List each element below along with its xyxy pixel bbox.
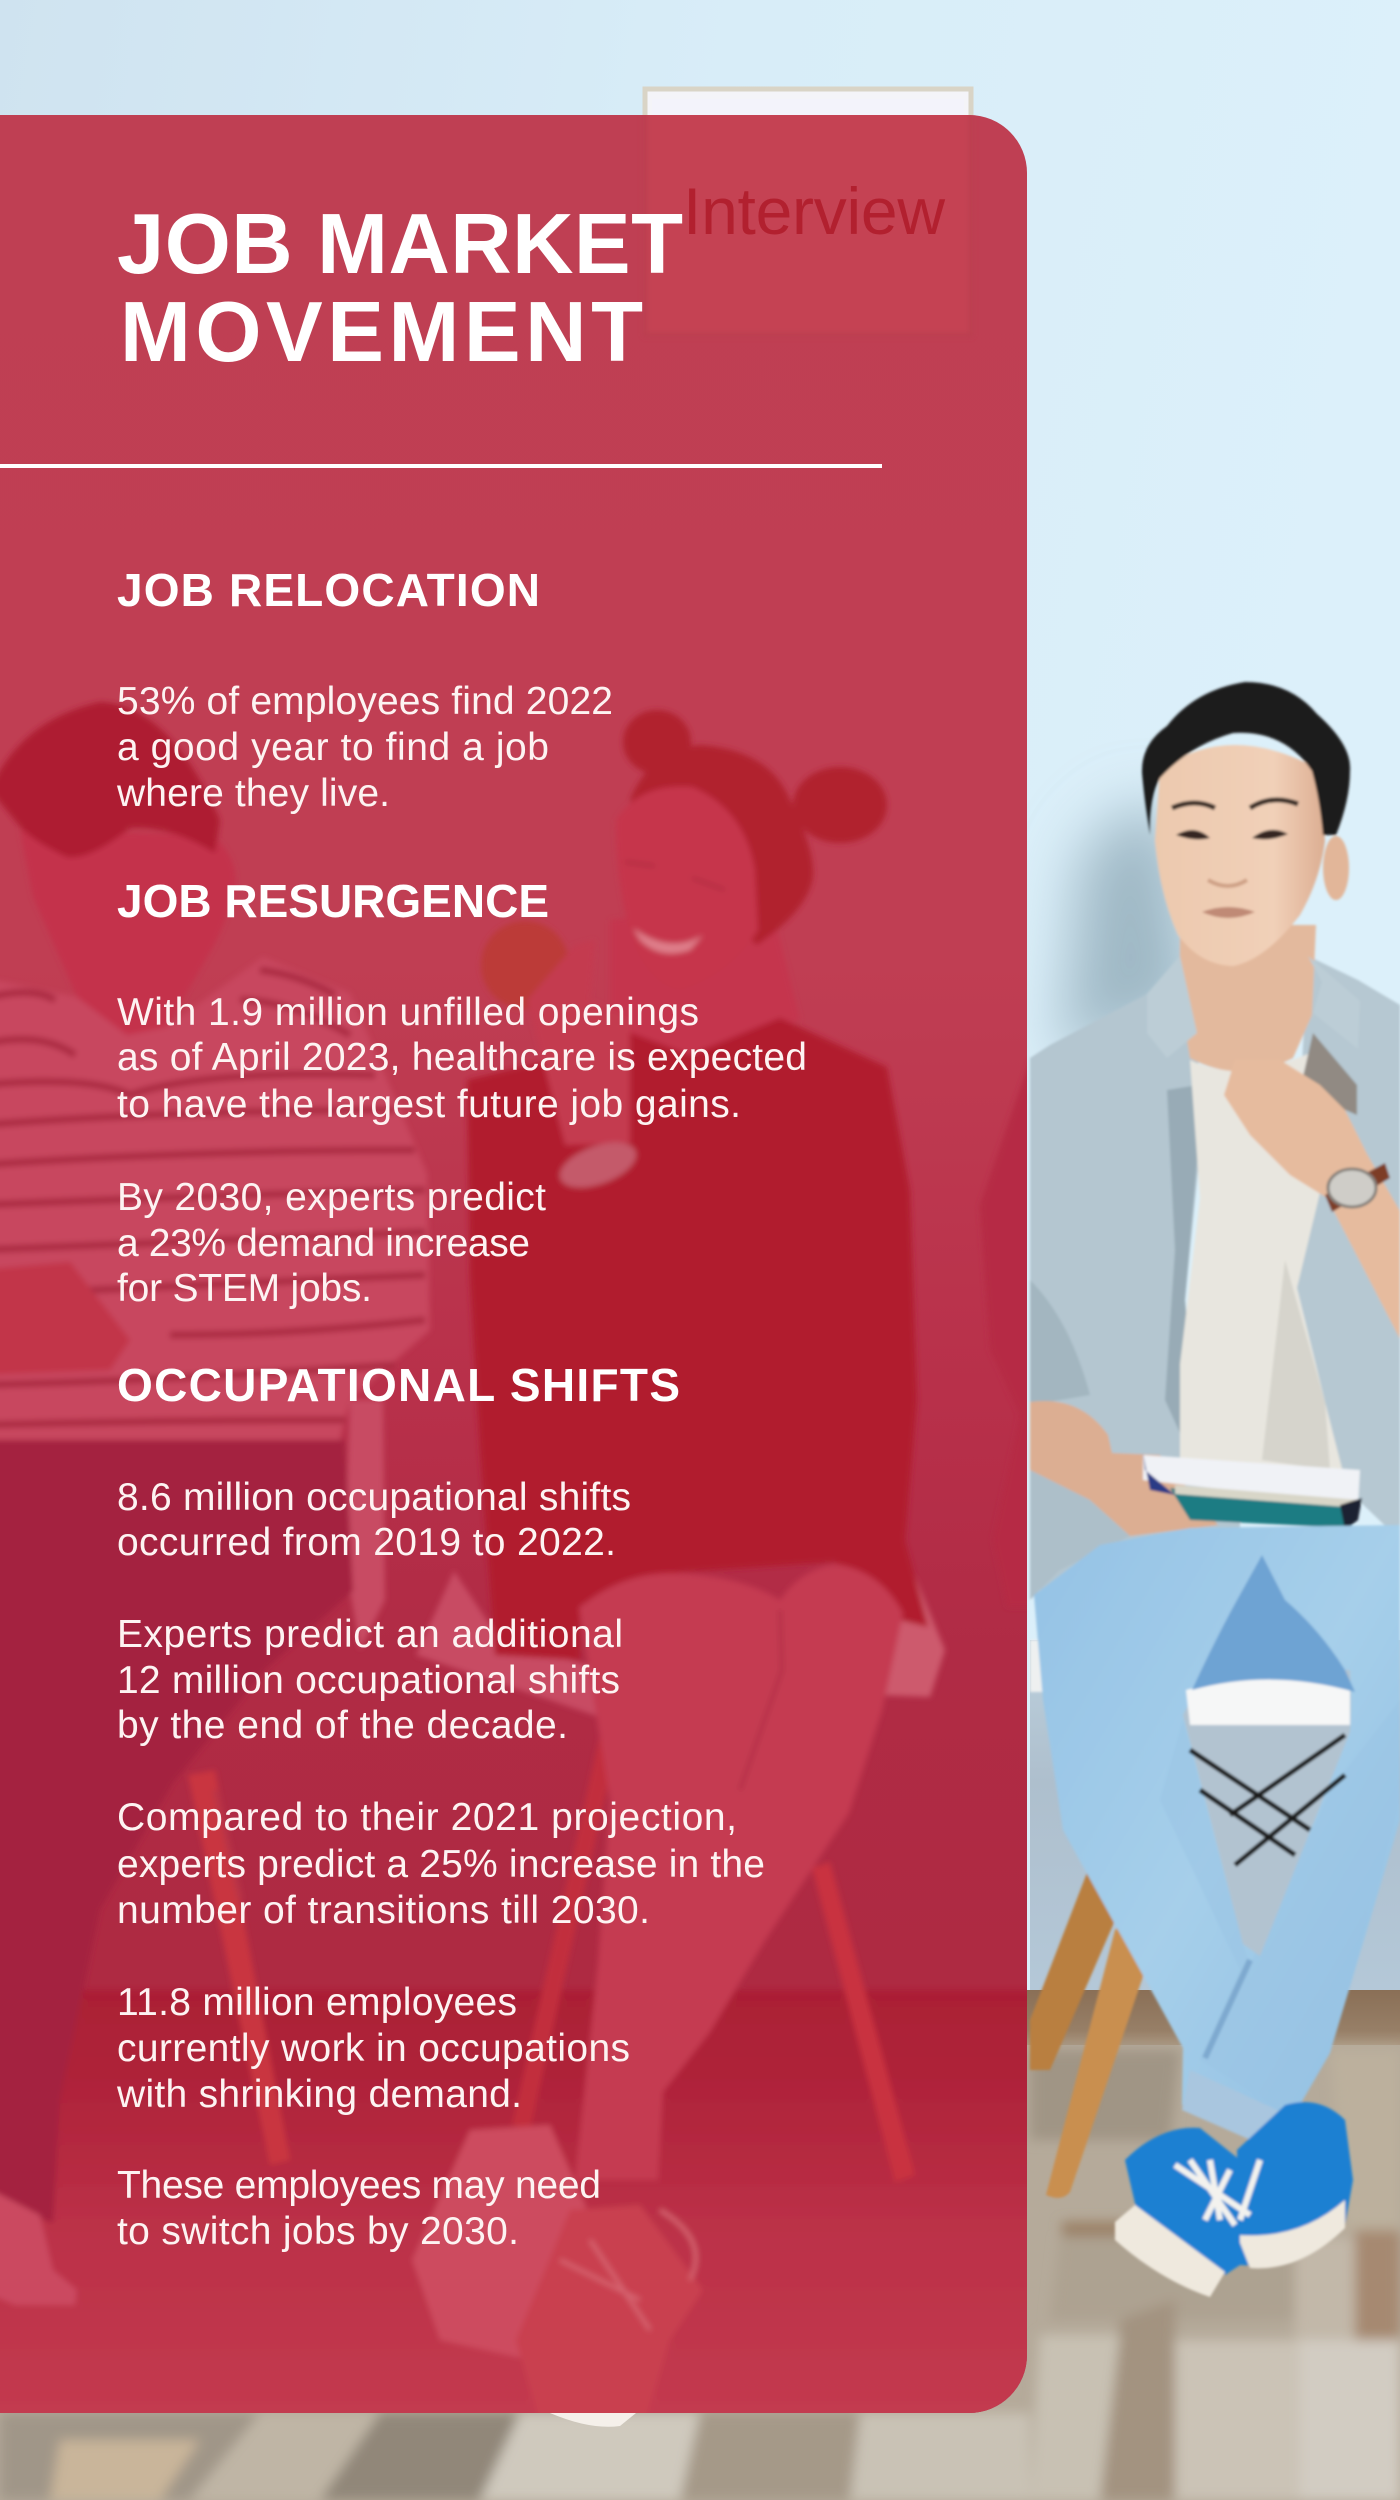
text: 25 percent increase: Compared to their 2021 projection, — [117, 1796, 737, 1839]
text: 8.6 million shifts: occurred from 2019 to 2022. — [117, 1521, 616, 1564]
woman: bracelet — [556, 1140, 640, 1192]
Interview sign text: Interview — [683, 174, 945, 248]
man on left: jeans — [0, 1435, 353, 2223]
wall picture frame with Interview sign — [645, 89, 971, 337]
heading: job resurgence: JOB RESURGENCE — [117, 875, 549, 927]
woman: arm with apple — [481, 921, 630, 1145]
text: 25 percent increase: experts predict a 25% increase in the — [117, 1843, 765, 1886]
title — [117, 197, 683, 380]
jeans — [1034, 1525, 1400, 2150]
man on left: shirt — [0, 957, 430, 1440]
face — [1155, 745, 1325, 966]
shirt stripes — [0, 970, 425, 1425]
text: shrinking demand — [116, 1981, 630, 2116]
woman: legs — [575, 1564, 903, 2180]
text: 8.6 million shifts: 8.6 million occupational shifts — [117, 1476, 631, 1519]
gap between legs — [1183, 1670, 1351, 1956]
woman: hair — [623, 710, 887, 945]
text: switch jobs: to switch jobs by 2030. — [117, 2210, 519, 2253]
title: MOVEMENT — [120, 285, 643, 380]
floor planks — [0, 2050, 1400, 2500]
woman: dress — [467, 1018, 928, 1660]
panel: translucent red overlay with photo of two people — [0, 100, 1060, 2490]
text: STEM demand: for STEM jobs. — [117, 1267, 372, 1310]
text: shrinking demand: 11.8 million employees — [117, 1981, 517, 2024]
text: job relocation: 53% of employees find 2022 — [117, 680, 613, 723]
notebooks — [1143, 1453, 1362, 1530]
chest hand and forearm — [1224, 1060, 1400, 1339]
text: shrinking demand: with shrinking demand. — [116, 2073, 522, 2116]
woman's chair — [188, 1398, 947, 2181]
neck — [1180, 925, 1316, 1072]
eyebrows and eyes — [1172, 800, 1298, 808]
chair — [1030, 1640, 1152, 2198]
ear — [1323, 836, 1349, 900]
wrist watch — [1325, 1163, 1390, 1212]
collars — [1147, 956, 1360, 1058]
text: 25 percent increase — [117, 1796, 765, 1932]
woman: neck — [613, 920, 794, 1014]
nose and lips — [1208, 880, 1247, 886]
tinted floor band — [0, 1990, 1027, 2413]
left forearm and hand — [1030, 1401, 1218, 1536]
panel base — [0, 115, 1027, 2413]
sole beyond panel — [550, 2413, 636, 2427]
text: healthcare openings: to have the largest future job gains. — [117, 1083, 741, 1126]
text: job relocation — [116, 680, 613, 815]
shirt — [1030, 956, 1240, 1590]
text: additional 12 million: 12 million occupational shifts — [117, 1659, 620, 1702]
man on left: hand — [0, 1262, 130, 1375]
man on left: face — [20, 830, 236, 1035]
tinted frame — [645, 100, 971, 335]
text: switch jobs — [117, 2164, 601, 2253]
text: shrinking demand: currently work in occupations — [117, 2027, 630, 2070]
text: STEM demand: By 2030, experts predict — [117, 1176, 546, 1219]
text: 8.6 million shifts — [117, 1476, 631, 1564]
text: healthcare openings: as of April 2023, healthcare is expected — [117, 1036, 807, 1079]
woman: face — [618, 784, 760, 940]
leg shading — [1160, 1700, 1400, 2117]
text: job relocation: a good year to find a job — [117, 726, 549, 769]
man on left: hair — [0, 702, 220, 857]
text: job relocation: where they live. — [116, 772, 390, 815]
wall shadow behind man — [1060, 806, 1200, 1060]
man on left: shoe — [0, 2184, 77, 2305]
shoes — [1115, 2102, 1353, 2297]
text: additional 12 million — [117, 1613, 623, 1747]
heading: occupational shifts: OCCUPATIONAL SHIFTS — [117, 1359, 680, 1411]
jeans cuff — [1182, 2070, 1295, 2155]
man on the right — [1030, 682, 1400, 2297]
divider line — [0, 464, 882, 468]
text: STEM demand: a 23% demand increase — [117, 1222, 530, 1265]
text: switch jobs: These employees may need — [117, 2164, 601, 2207]
woman: shoes — [412, 2125, 596, 2360]
hair — [1142, 682, 1350, 835]
fourth person at panel edge — [981, 1070, 1027, 1348]
text: additional 12 million: Experts predict an additional — [117, 1613, 623, 1656]
text: 25 percent increase: number of transitions till 2030. — [117, 1889, 650, 1932]
t-shirt — [1180, 1050, 1345, 1480]
text: additional 12 million: by the end of the decade. — [117, 1704, 568, 1747]
text: healthcare openings — [117, 991, 807, 1126]
text: STEM demand — [117, 1176, 546, 1310]
tinted photo — [0, 100, 1060, 2490]
title: JOB MARKET — [117, 197, 683, 292]
heading: job relocation: JOB RELOCATION — [117, 564, 540, 616]
text: healthcare openings: With 1.9 million unfilled openings — [117, 991, 699, 1034]
